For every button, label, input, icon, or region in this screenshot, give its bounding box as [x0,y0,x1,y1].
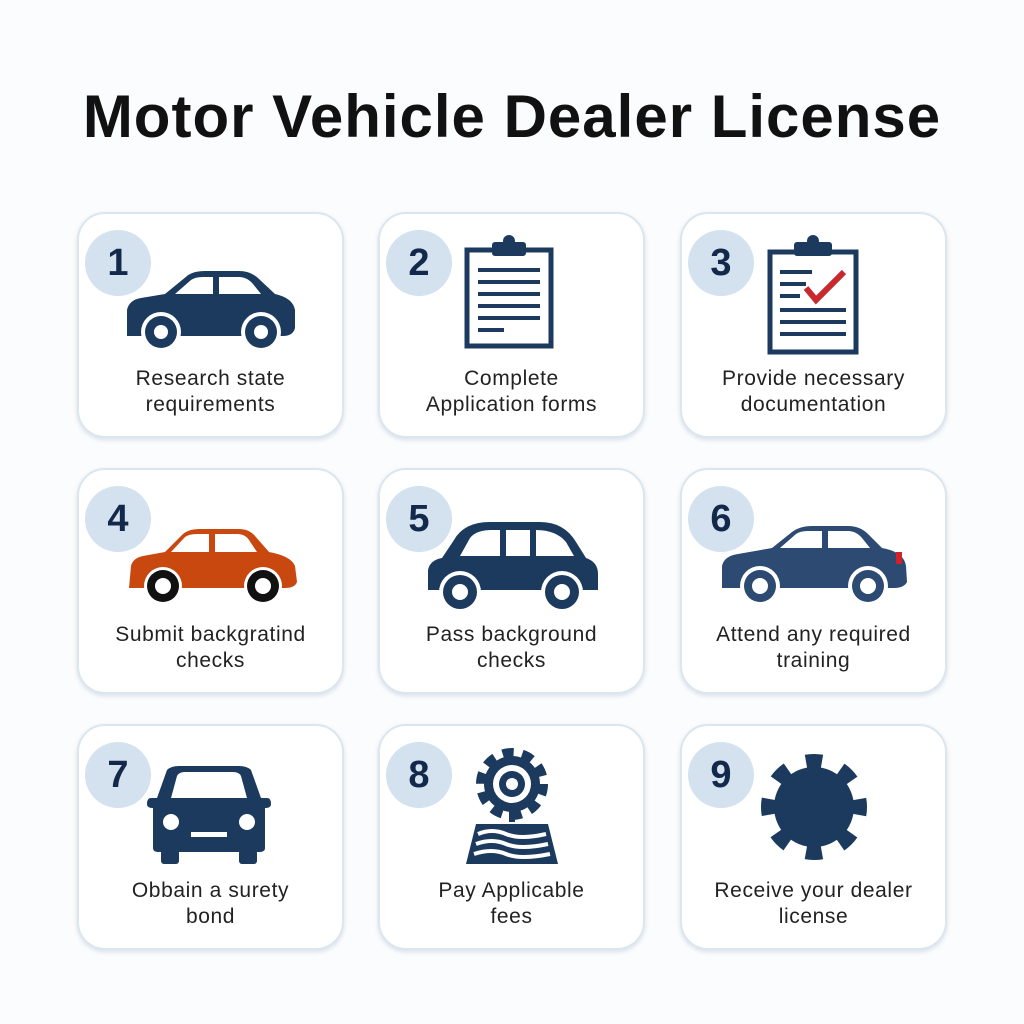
label 2 [426,367,597,416]
badge 4: 4 [107,498,129,540]
icon: car front [147,766,271,864]
badge 6: 6 [710,498,732,540]
label 7: Obbain a surety [132,879,289,902]
badge 4 [85,486,151,552]
label 6 [716,623,911,672]
badge 8 [386,742,452,808]
icon: orange car [129,529,297,602]
label 8: fees [490,905,533,928]
badge 3 [688,230,754,296]
icon: clipboard [464,235,554,348]
label 7 [132,879,289,928]
label 7: bond [186,905,235,928]
label 3: documentation [741,393,886,416]
label 5 [426,623,597,672]
panel: step 4 [77,468,344,694]
label 6: training [777,649,850,672]
badge 9 [688,742,754,808]
icon: rounded car [428,522,598,609]
label 9: Receive your dealer [714,879,913,902]
badge 8: 8 [408,754,430,796]
panel: step 9 [680,724,947,950]
label 1 [136,367,285,416]
label 9: license [779,905,848,928]
title: Motor Vehicle Dealer License [83,83,941,150]
icon: car side [127,271,295,348]
badge 7 [85,742,151,808]
badge 9: 9 [710,754,732,796]
badge 3: 3 [710,242,732,284]
label 3: Provide necessary [722,367,905,390]
label 4: Submit backgratind [115,623,306,646]
badge 2 [386,230,452,296]
label 5: Pass background [426,623,597,646]
label 4 [115,623,306,672]
label 8: Pay Applicable [438,879,585,902]
label 2: Application forms [426,393,597,416]
label 1: Research state [136,367,285,390]
label 1: requirements [146,393,275,416]
badge 2: 2 [408,242,430,284]
icon: clipboard with check [768,235,858,354]
badge 7: 7 [107,754,129,796]
panel: step 8 [378,724,645,950]
label 8 [438,879,585,928]
panel: step 2 [378,212,645,438]
panel: step 5 [378,468,645,694]
panel: step 3 [680,212,947,438]
panel: step 1 [77,212,344,438]
label 9 [714,879,913,928]
badge 5: 5 [408,498,430,540]
icon: gear over map [466,748,558,864]
label 2: Complete [464,367,559,390]
panel: step 7 [77,724,344,950]
badge 1: 1 [107,242,129,284]
panel: step 6 [680,468,947,694]
badge 6 [688,486,754,552]
label 4: checks [176,649,245,672]
label 5: checks [477,649,546,672]
icon: sedan [722,526,907,602]
label 6: Attend any required [716,623,911,646]
icon: gear [761,754,867,860]
label 3 [722,367,905,416]
badge 5 [386,486,452,552]
badge 1 [85,230,151,296]
